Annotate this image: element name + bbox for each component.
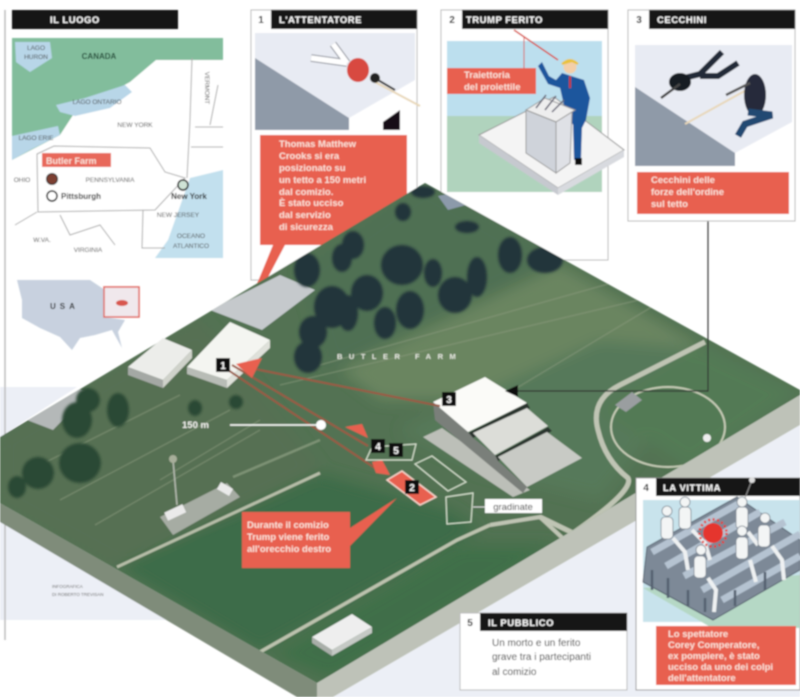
arrow: cecchini leader line [505,221,708,397]
building right [433,377,582,493]
marker: pittsburgh [47,191,101,201]
marker 5: 5 [393,446,399,457]
heading: la vittima: 4 [643,483,649,494]
label: la vittima: Corey Comperatore, [668,640,759,651]
heading: cecchini: 3 [636,15,642,26]
text: il pubblico: Un morto e un ferito [492,638,581,649]
label: la vittima: ex pompiere, è stato [668,651,760,662]
usa inset map: USA [50,302,79,311]
distance marker: 150 m: 150 m [182,420,209,431]
label: gradinate [473,499,542,513]
front edge band [0,503,317,697]
label: cecchini: forze dell'ordine [651,187,724,198]
white barn [312,614,372,650]
heading: il pubblico: IL PUBBLICO [488,618,554,629]
trees [294,186,563,373]
callout: durante il comizio: Trump viene ferito [247,532,330,543]
label: butler farm: BUTLER FARM [337,352,462,361]
label: la vittima [656,626,796,685]
label: traiettoria: del proiettile [464,82,520,93]
panel 3: cecchini [628,10,795,221]
text: il pubblico: al comizio [492,667,537,678]
panel 4: la vittima [636,477,800,690]
credit text: INFOGRAFICA [52,584,83,589]
usa inset map [17,280,139,350]
illustration: snipers on roof [635,45,792,166]
callout: durante il comizio [242,498,397,568]
location map: LAGO ONTARIO [72,99,122,106]
roads [117,473,320,567]
distance marker: 150 m [182,420,326,431]
callout: attentatore text: posizionato su [279,163,346,174]
marker 4: 4 [375,442,381,453]
marker: new york [171,180,207,201]
panel 5: il pubblico [460,613,627,690]
location map: PENNSYLVANIA [86,177,135,184]
location map: OHIO [14,177,30,184]
label: traiettoria [447,68,536,94]
location map: HURON [24,54,48,61]
text: il pubblico: grave tra i partecipanti [492,652,591,663]
marker: butler farm [42,153,111,184]
label: gradinate: gradinate [493,502,533,513]
marker: butler farm: Butler Farm [46,156,97,166]
heading: trump ferito: TRUMP FERITO [466,15,543,26]
heading: la vittima: LA VITTIMA [663,483,721,494]
heading: trump ferito: 2 [449,15,455,26]
callout: durante il comizio: all'orecchio destro [247,544,331,555]
callout: attentatore text: È stato ucciso [279,198,344,209]
label: cecchini: Cecchini delle [651,175,715,186]
heading: trump ferito [449,10,608,29]
racetrack [611,387,725,467]
location map: NEW JERSEY [157,212,200,219]
marker: pittsburgh: Pittsburgh [61,192,101,201]
location map: OCEANO [177,233,205,240]
illustration: trump at podium [447,30,624,195]
lower parking [160,483,240,535]
stage: red area [387,471,436,505]
label: cecchini [637,172,789,214]
panel: il luogo [5,10,223,640]
label: la vittima: dell'attentatore [668,673,736,684]
heading: il luogo: IL LUOGO [50,15,100,26]
marker: new york: New York [171,192,207,201]
heading: la vittima [643,478,800,496]
marker 1: 1 [220,361,226,372]
callout: attentatore text: di sicurezza [279,222,334,233]
location map: W.VA. [33,237,51,244]
heading: il luogo [12,10,178,29]
callout: durante il comizio: Durante il comizio [247,520,329,531]
callout: attentatore text [232,135,407,352]
marker 1 [216,358,230,372]
building left [128,322,270,388]
heading: il pubblico [467,613,627,631]
label: traiettoria: Traiettoria [464,70,511,81]
aerial map: butler farm [0,183,800,697]
label: la vittima: Lo spettatore [668,629,728,640]
concrete strip [423,428,530,497]
callout: attentatore text: dal servizio [279,210,331,221]
credit text: DI ROBERTO TREVISAN [52,592,104,597]
stands outlines [366,444,473,524]
marker 3: 3 [446,395,452,406]
location map: NEW YORK [117,122,153,129]
marker 3 [442,392,456,406]
marker 2: 2 [409,483,415,494]
heading: cecchini: CECCHINI [657,15,707,26]
label: la vittima: ucciso da uno dei colpi [668,662,773,673]
heading: cecchini [636,10,795,29]
marker 5 [389,443,403,457]
callout: attentatore text: dal comizio. [279,187,333,198]
arrow: from 3 to 1 [236,358,440,406]
heading: l'attentatore: 1 [258,15,264,26]
panel 2: trump ferito [441,10,624,260]
location map [12,38,223,258]
road edge band [317,395,800,697]
location map: VERMONT [203,72,210,104]
location map: VIRGINIA [74,247,103,254]
illustration: shooter on roof [255,33,420,130]
callout: attentatore text: Crooks si era [279,151,340,162]
callout: attentatore text: Thomas Matthew [279,139,357,150]
label: cecchini: sul tetto [651,199,688,210]
heading: l'attentatore: L'ATTENTATORE [279,15,362,26]
callout: attentatore text: un tetto a 150 metri [279,175,366,186]
marker 2 [405,480,419,494]
location map: LAGO ERIE [18,135,54,142]
heading: il pubblico: 5 [467,618,473,629]
location map: CANADA [82,52,117,61]
marker 4 [371,439,385,453]
arrow: from 1 to stage [228,365,390,475]
panel 1: l'attentatore [232,10,420,352]
illustration: spectators on bleachers [643,477,800,628]
backdrop: pale shadow areas [0,387,800,697]
location map: ATLANTICO [173,243,209,250]
location map: LAGO [27,45,45,52]
heading: l'attentatore [258,10,417,29]
